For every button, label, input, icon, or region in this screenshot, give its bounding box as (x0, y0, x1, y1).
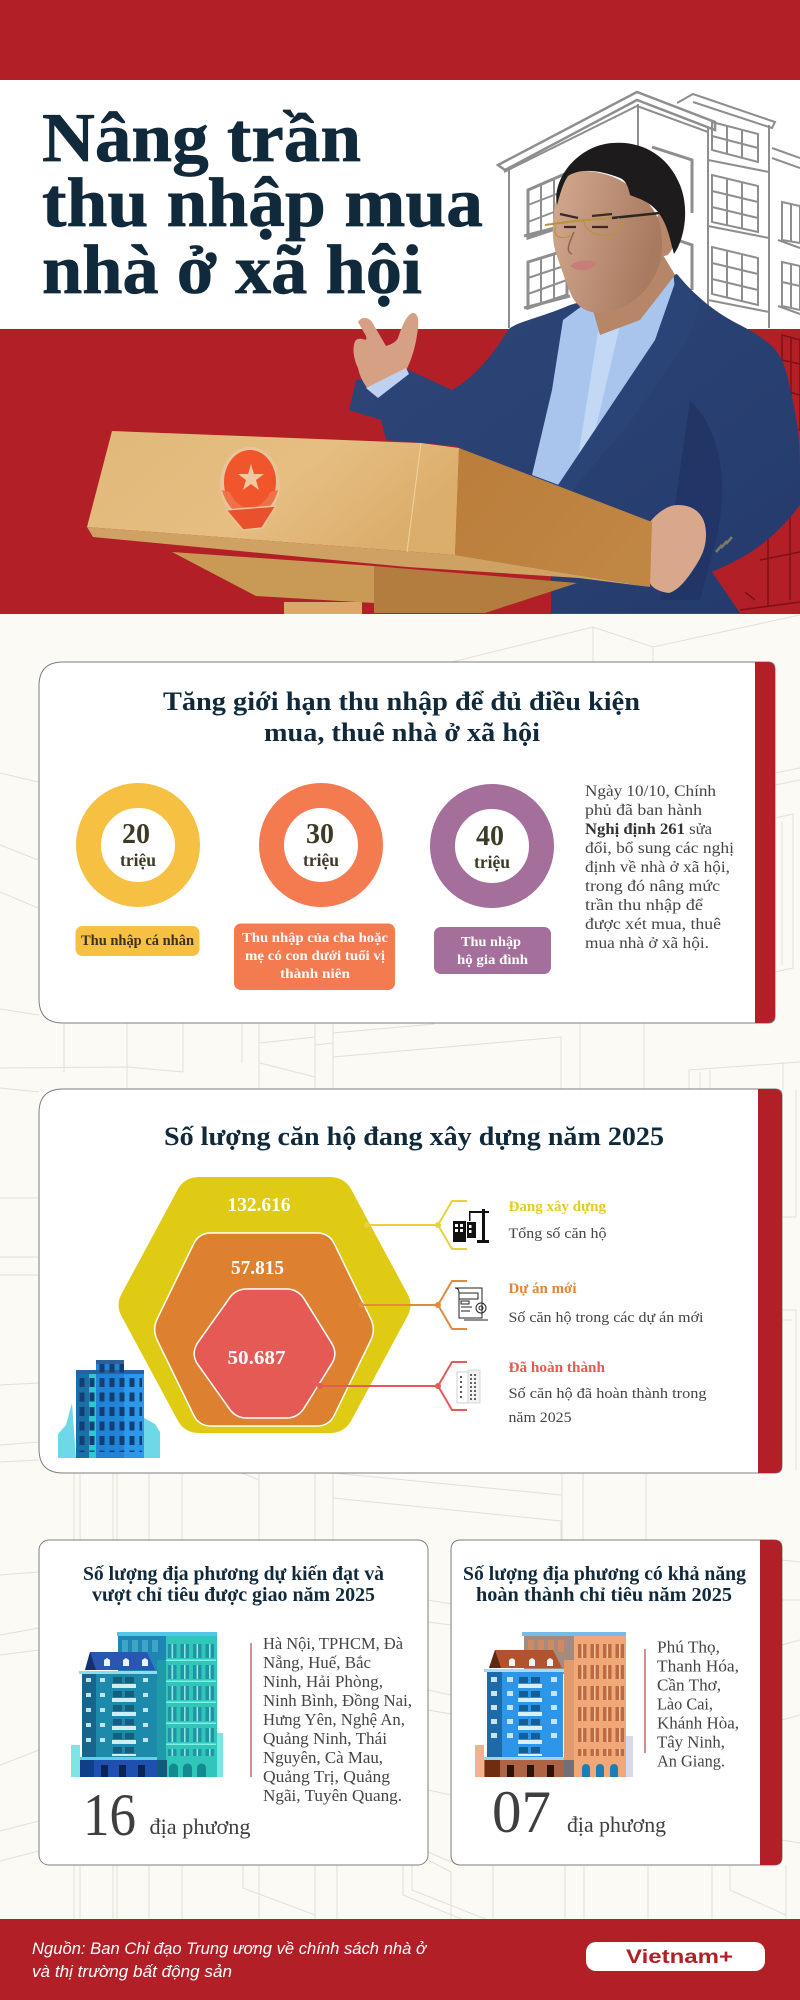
list of 16 localities: Ngãi, Tuyên Quang. (263, 1786, 402, 1805)
decree paragraph: phủ đã ban hành (585, 802, 702, 819)
icon: crane and buildings (453, 1209, 489, 1243)
podium shaft (284, 602, 362, 614)
source note: và thị trường bất động sản (32, 1962, 232, 1981)
jacket cuff buttons (716, 537, 732, 552)
red side bar (755, 662, 775, 1023)
heading: Tăng giới hạn thu nhập để đủ điều kiện (163, 686, 640, 716)
Vietnam+ logo: Vietnam+ (626, 1947, 733, 1968)
icon: project document (455, 1288, 488, 1320)
stat: 07: 07 (492, 1779, 551, 1845)
panel: localities likely to meet target (451, 1540, 782, 1865)
label: parent income (234, 924, 395, 990)
stat: 16 (83, 1782, 250, 1848)
source note: Nguồn: Ban Chỉ đạo Trung ương về chính sách nhà ở (32, 1939, 428, 1958)
illustration: outlined building sketch (498, 92, 800, 328)
podium front (87, 431, 459, 555)
list of 7 localities: An Giang. (657, 1752, 725, 1770)
background building line pattern (0, 615, 800, 1932)
ring: 30 triệu: 30 (306, 819, 334, 850)
heading: Số lượng căn hộ đang xây dựng năm 2025 (164, 1121, 664, 1151)
label: personal income: Thu nhập cá nhân (81, 933, 194, 949)
jacket shading (660, 400, 722, 600)
glasses (545, 213, 660, 238)
nested hexagon chart: 50.687 (228, 1348, 286, 1369)
stat: 07 (492, 1779, 666, 1845)
list of 7 localities (657, 1638, 739, 1770)
heading: hoàn thành chỉ tiêu năm 2025 (476, 1585, 732, 1606)
emblem (220, 447, 280, 530)
stat: 16: địa phương (150, 1814, 250, 1839)
ring: 40 triệu (442, 796, 542, 896)
decree paragraph: Nghị định 261 sửa (585, 821, 712, 838)
ring: 30 triệu: triệu (303, 850, 339, 870)
label: household income (434, 927, 551, 974)
list of 16 localities: Hưng Yên, Nghệ An, (263, 1710, 405, 1729)
Vietnam+ logo (586, 1942, 765, 1971)
stat: 16: 16 (83, 1782, 136, 1848)
hair (556, 143, 685, 254)
red side bar (758, 1089, 782, 1473)
nested hexagon chart (118, 1177, 410, 1433)
eyes and brows (560, 214, 612, 227)
decree paragraph: được xét mua, thuê (585, 916, 721, 933)
decree paragraph: trần thu nhập để (585, 897, 703, 914)
top red band (0, 0, 800, 80)
title: nhà ở xã hội (42, 232, 422, 309)
shirt (532, 270, 675, 490)
heading (83, 1564, 384, 1606)
list of 16 localities (263, 1634, 412, 1805)
illustration: dark red building lines (740, 335, 800, 610)
heading: vượt chỉ tiêu được giao năm 2025 (92, 1585, 375, 1606)
legend: under construction (508, 1199, 606, 1242)
list of 7 localities: Thanh Hóa, (657, 1656, 739, 1676)
list of 16 localities: Hà Nội, TPHCM, Đà (263, 1634, 404, 1653)
decree paragraph: định về nhà ở xã hội, (585, 859, 730, 876)
list of 7 localities: Khánh Hòa, (657, 1714, 739, 1732)
list of 7 localities: Cần Thơ, (657, 1676, 721, 1694)
illustration: blue tower (58, 1360, 160, 1458)
red side bar (760, 1540, 782, 1865)
decree paragraph (585, 783, 735, 952)
legend: completed: năm 2025 (508, 1410, 572, 1426)
header white band (0, 80, 800, 329)
podium edge band (87, 527, 650, 587)
list of 16 localities: Ninh Bình, Đồng Nai, (263, 1691, 412, 1710)
list of 16 localities: Quảng Trị, Quảng (263, 1767, 390, 1786)
title (42, 100, 483, 309)
label: personal income (76, 926, 200, 956)
illustration: teal building (71, 1632, 223, 1777)
legend: completed: Số căn hộ đã hoàn thành trong (508, 1386, 707, 1402)
legend: under construction: Đang xây dựng (508, 1199, 606, 1215)
list of 7 localities: Phú Thọ, (657, 1638, 720, 1656)
ring: 40 triệu: 40 (476, 821, 504, 852)
decree paragraph: trong đó nâng mức (585, 878, 720, 895)
connector: under construction (365, 1201, 467, 1249)
decree paragraph: mua nhà ở xã hội. (585, 935, 709, 952)
podium taper (172, 552, 374, 603)
title: thu nhập mua (42, 165, 483, 242)
header red band (0, 329, 800, 614)
icon: completed tower (457, 1370, 480, 1403)
legend: new projects (508, 1281, 704, 1326)
list of 16 localities: Nguyên, Cà Mau, (263, 1748, 383, 1767)
heading: Số lượng địa phương có khả năng (463, 1564, 746, 1585)
heading (163, 686, 640, 747)
footer band (0, 1919, 800, 2000)
heading: Số lượng địa phương dự kiến đạt và (83, 1564, 384, 1585)
connector: completed (318, 1362, 467, 1410)
decree paragraph: đổi, bổ sung các nghị (585, 840, 735, 857)
list of 16 localities: Quảng Ninh, Thái (263, 1729, 387, 1748)
panel: localities exceeding target (39, 1540, 428, 1865)
illustration: blue and orange building (475, 1632, 633, 1777)
list of 16 localities: Ninh, Hải Phòng, (263, 1672, 383, 1691)
label: parent income: thành niên (280, 967, 350, 982)
label: household income: Thu nhập (461, 935, 521, 950)
card background (39, 1540, 428, 1865)
card background (451, 1540, 782, 1865)
nested hexagon chart: 132.616 (228, 1195, 291, 1216)
nose (568, 232, 574, 254)
raised hand (354, 313, 418, 393)
card background (39, 1089, 782, 1473)
lapel (556, 277, 700, 490)
label: parent income: mẹ có con dưới tuổi vị (245, 949, 385, 964)
divider (644, 1649, 646, 1753)
ring: 20 triệu: triệu (120, 850, 156, 870)
list of 7 localities: Tây Ninh, (657, 1732, 725, 1752)
label: household income: hộ gia đình (457, 953, 528, 968)
title: Nâng trần (42, 100, 361, 177)
panel: income ceilings (39, 662, 775, 1023)
ring: 40 triệu: triệu (474, 852, 510, 872)
legend: completed: Đã hoàn thành (508, 1360, 606, 1376)
neck (575, 250, 675, 335)
nested hexagon chart: 57.815 (231, 1258, 284, 1279)
divider (250, 1643, 252, 1777)
cuff (366, 368, 409, 398)
connector: new projects (359, 1281, 467, 1329)
list of 16 localities: Nẵng, Huế, Bắc (263, 1653, 371, 1672)
legend: completed (508, 1360, 707, 1426)
shirt placket shading (576, 325, 620, 470)
mouth (570, 260, 597, 270)
stat: 07: địa phương (567, 1812, 666, 1837)
photo: speaker at lectern (87, 143, 800, 614)
ear (653, 212, 675, 256)
panel: apartments under construction (39, 1089, 782, 1473)
face (553, 171, 662, 313)
list of 7 localities: Lào Cai, (657, 1694, 713, 1714)
ring: 20 triệu (88, 796, 188, 894)
source note (32, 1939, 428, 1981)
legend: under construction: Tổng số căn hộ (508, 1226, 606, 1242)
legend: new projects: Dự án mới (508, 1281, 576, 1297)
card background (39, 662, 775, 1023)
legend: new projects: Số căn hộ trong các dự án mới (508, 1310, 704, 1326)
jacket (349, 274, 800, 613)
heading (463, 1564, 746, 1606)
podium side (455, 448, 652, 587)
ring: 30 triệu (272, 796, 370, 894)
right hand (640, 505, 706, 593)
label: parent income: Thu nhập của cha hoặc (242, 931, 388, 946)
decree paragraph: Ngày 10/10, Chính (585, 783, 716, 800)
ring: 20 triệu: 20 (122, 819, 150, 850)
heading: mua, thuê nhà ở xã hội (264, 717, 540, 747)
